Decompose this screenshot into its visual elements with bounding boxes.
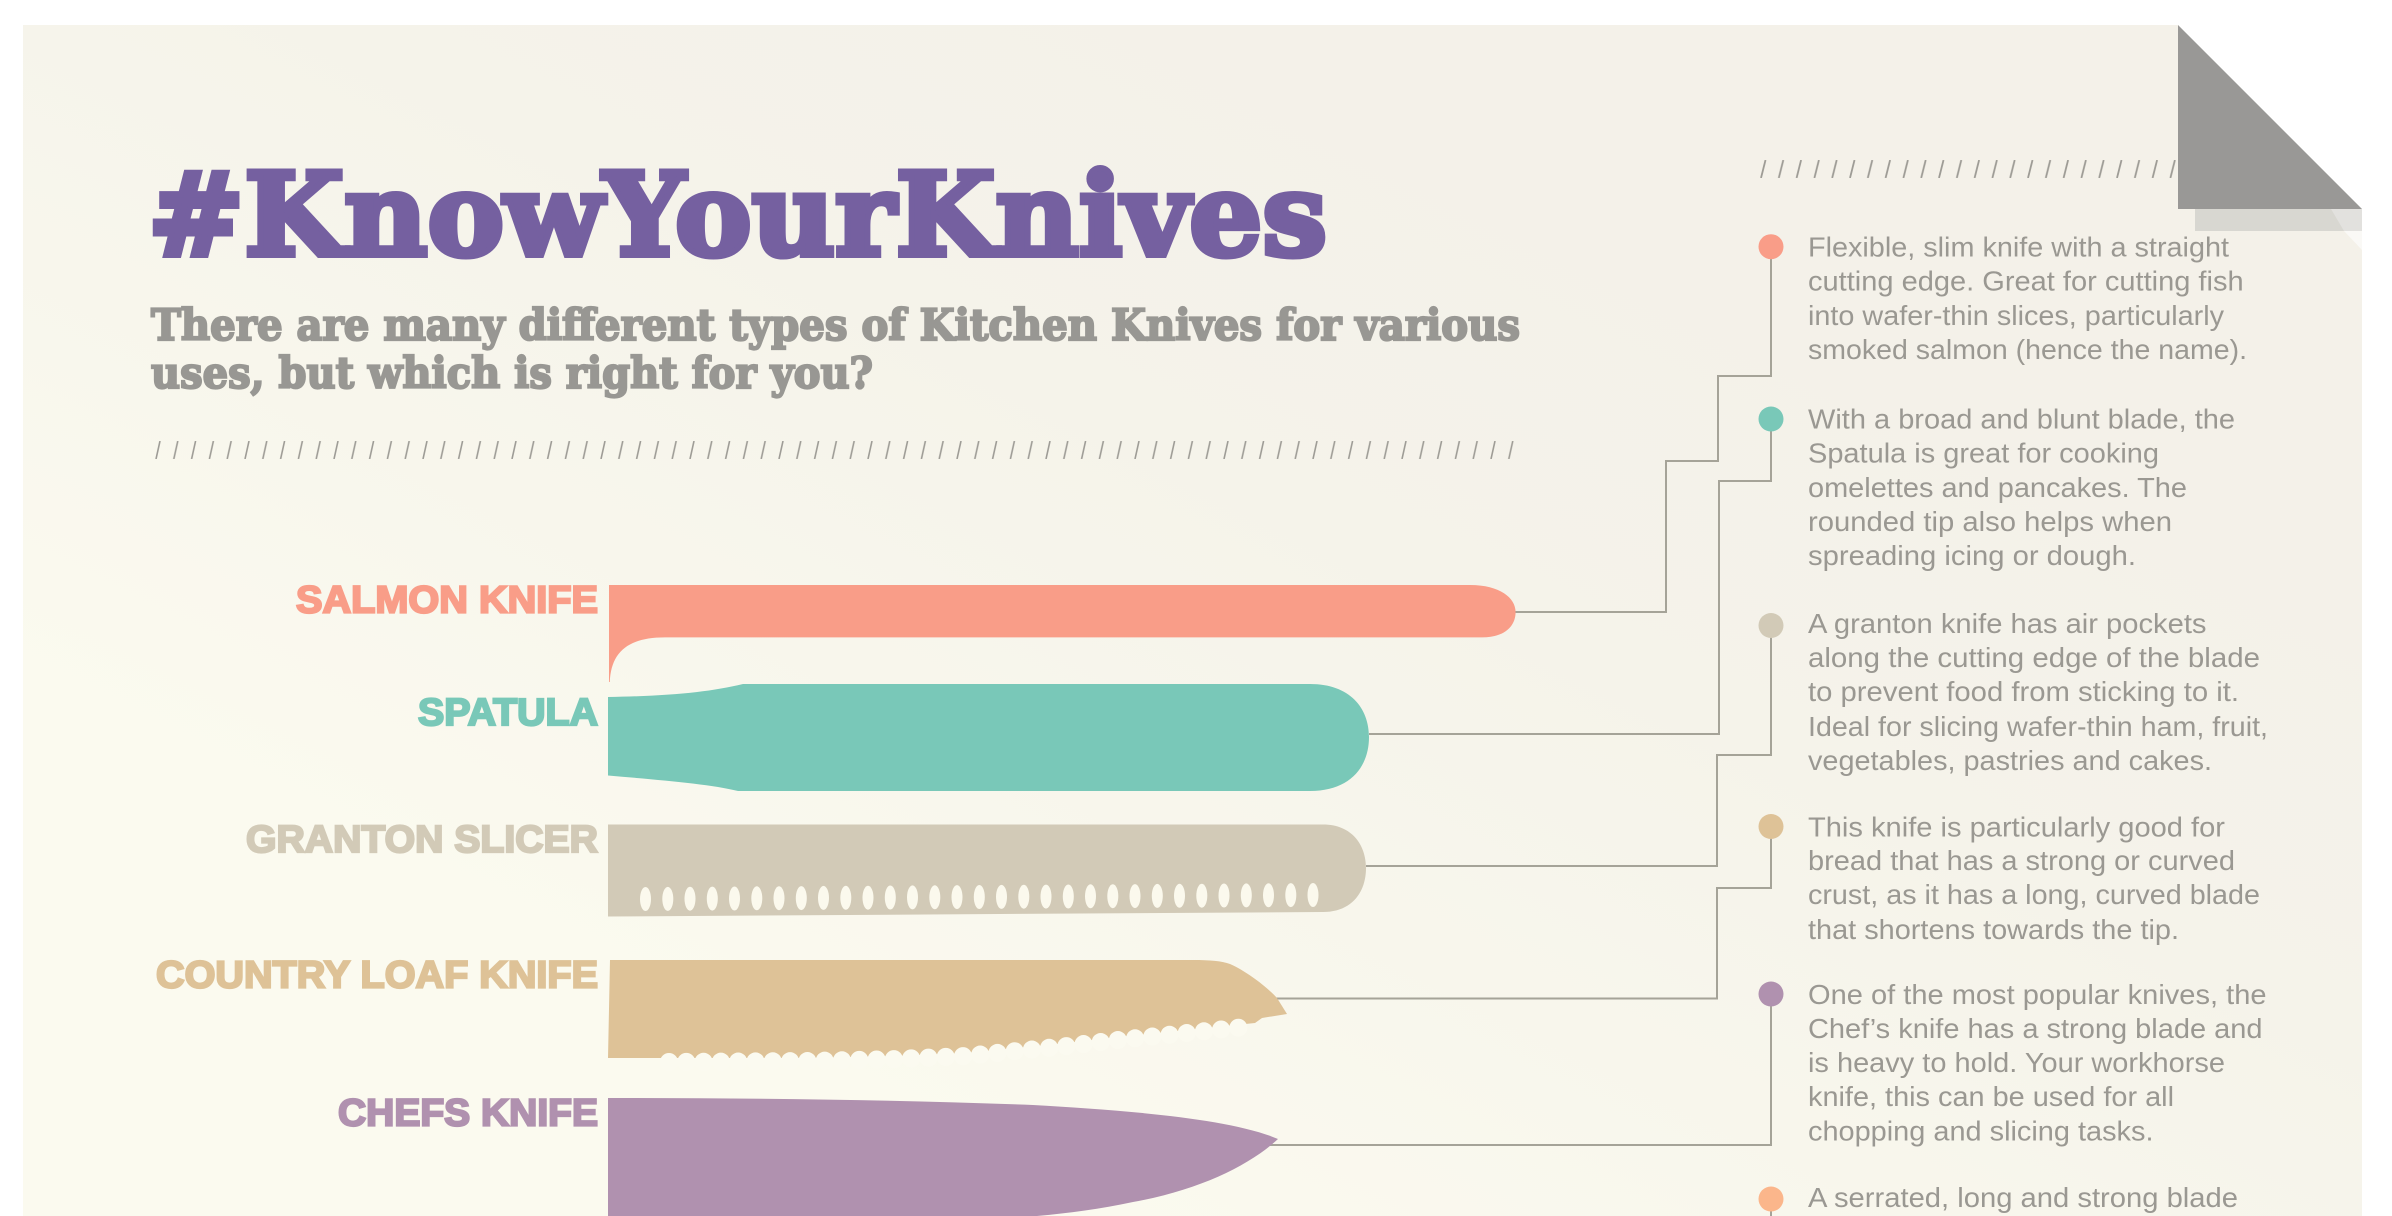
- knife: granton slicer: [246, 819, 1366, 916]
- knife: chefs knife: [338, 1092, 1278, 1216]
- text: granton: to prevent food from sticking to it.: [1808, 676, 2239, 707]
- text: granton: along the cutting edge of the blade: [1808, 642, 2260, 673]
- text: chefs: [1808, 979, 2266, 1147]
- folded corner: [2178, 25, 2362, 250]
- dot: chefs: [1758, 982, 1784, 1006]
- text: salmon: [1808, 232, 2247, 365]
- fold flap: [2178, 25, 2362, 209]
- dot: spatula: [1758, 406, 1784, 432]
- text: country loaf: bread that has a strong or curved: [1808, 845, 2235, 876]
- fold shadow: [2195, 209, 2362, 250]
- knife: country loaf knife: [156, 954, 1287, 1062]
- knife: salmon knife: [296, 580, 1516, 682]
- subtitle: There are many different types of Kitchen Knives for various: [151, 301, 1520, 351]
- description: country loaf knife: [1758, 812, 2260, 945]
- subtitle: uses, but which is right for you?: [151, 349, 873, 399]
- text: spatula: Spatula is great for cooking: [1808, 438, 2159, 468]
- title: #KnowYourKnives: [148, 148, 1327, 282]
- label: country loaf knife: COUNTRY LOAF KNIFE: [156, 954, 598, 996]
- label: salmon knife: SALMON KNIFE: [296, 580, 598, 622]
- description: spatula: [1758, 404, 2235, 571]
- label: granton slicer: GRANTON SLICER: [246, 819, 598, 861]
- blade: spatula: [608, 684, 1369, 791]
- text: chefs: knife, this can be used for all: [1808, 1081, 2174, 1112]
- label: chefs knife: CHEFS KNIFE: [338, 1092, 598, 1134]
- dot: granton: [1758, 613, 1784, 638]
- text: chefs: is heavy to hold. Your workhorse: [1808, 1047, 2225, 1078]
- text: granton: vegetables, pastries and cakes.: [1808, 745, 2212, 776]
- text: country loaf: crust, as it has a long, curved blade: [1808, 879, 2260, 910]
- text: spatula: spreading icing or dough.: [1808, 540, 2136, 571]
- text: salmon: cutting edge. Great for cutting fish: [1808, 266, 2244, 297]
- dot: country loaf: [1758, 814, 1784, 839]
- text: granton: [1808, 608, 2268, 776]
- text: salmon: into wafer-thin slices, particularly: [1808, 300, 2224, 331]
- text: spatula: With a broad and blunt blade, the: [1808, 404, 2235, 435]
- serrations: [669, 1026, 1255, 1062]
- air pockets: [640, 883, 1318, 911]
- text: granton: A granton knife has air pockets: [1808, 608, 2206, 639]
- dot: serrated: [1758, 1186, 1784, 1212]
- text: serrated: A serrated, long and strong blade: [1808, 1182, 2238, 1213]
- label: spatula: SPATULA: [418, 692, 598, 734]
- text: salmon: Flexible, slim knife with a straight: [1808, 232, 2229, 263]
- text: spatula: rounded tip also helps when: [1808, 506, 2172, 537]
- text: chefs: chopping and slicing tasks.: [1808, 1116, 2154, 1147]
- text: granton: Ideal for slicing wafer-thin ham, fruit,: [1808, 711, 2268, 742]
- connector lines: [1269, 246, 1771, 1216]
- blade: salmon knife: [609, 585, 1516, 682]
- text: country loaf: [1808, 812, 2260, 945]
- subtitle: [151, 301, 1520, 399]
- knife: spatula: [418, 684, 1369, 791]
- blade: granton slicer: [608, 824, 1366, 916]
- text: spatula: [1808, 404, 2235, 571]
- text: salmon: smoked salmon (hence the name).: [1808, 334, 2247, 365]
- description: chefs knife: [1758, 979, 2266, 1147]
- text: chefs: One of the most popular knives, the: [1808, 979, 2266, 1010]
- text: country loaf: This knife is particularly good for: [1808, 812, 2225, 842]
- blade: country loaf knife: [608, 960, 1287, 1058]
- text: spatula: omelettes and pancakes. The: [1808, 472, 2187, 503]
- description: salmon knife: [1758, 232, 2247, 365]
- blade: chefs knife: [608, 1098, 1278, 1216]
- description: granton slicer: [1758, 608, 2268, 776]
- description: serrated knife: [1758, 1182, 2238, 1213]
- text: chefs: Chef’s knife has a strong blade and: [1808, 1013, 2262, 1044]
- dot: salmon: [1758, 234, 1784, 259]
- text: country loaf: that shortens towards the tip.: [1808, 914, 2179, 945]
